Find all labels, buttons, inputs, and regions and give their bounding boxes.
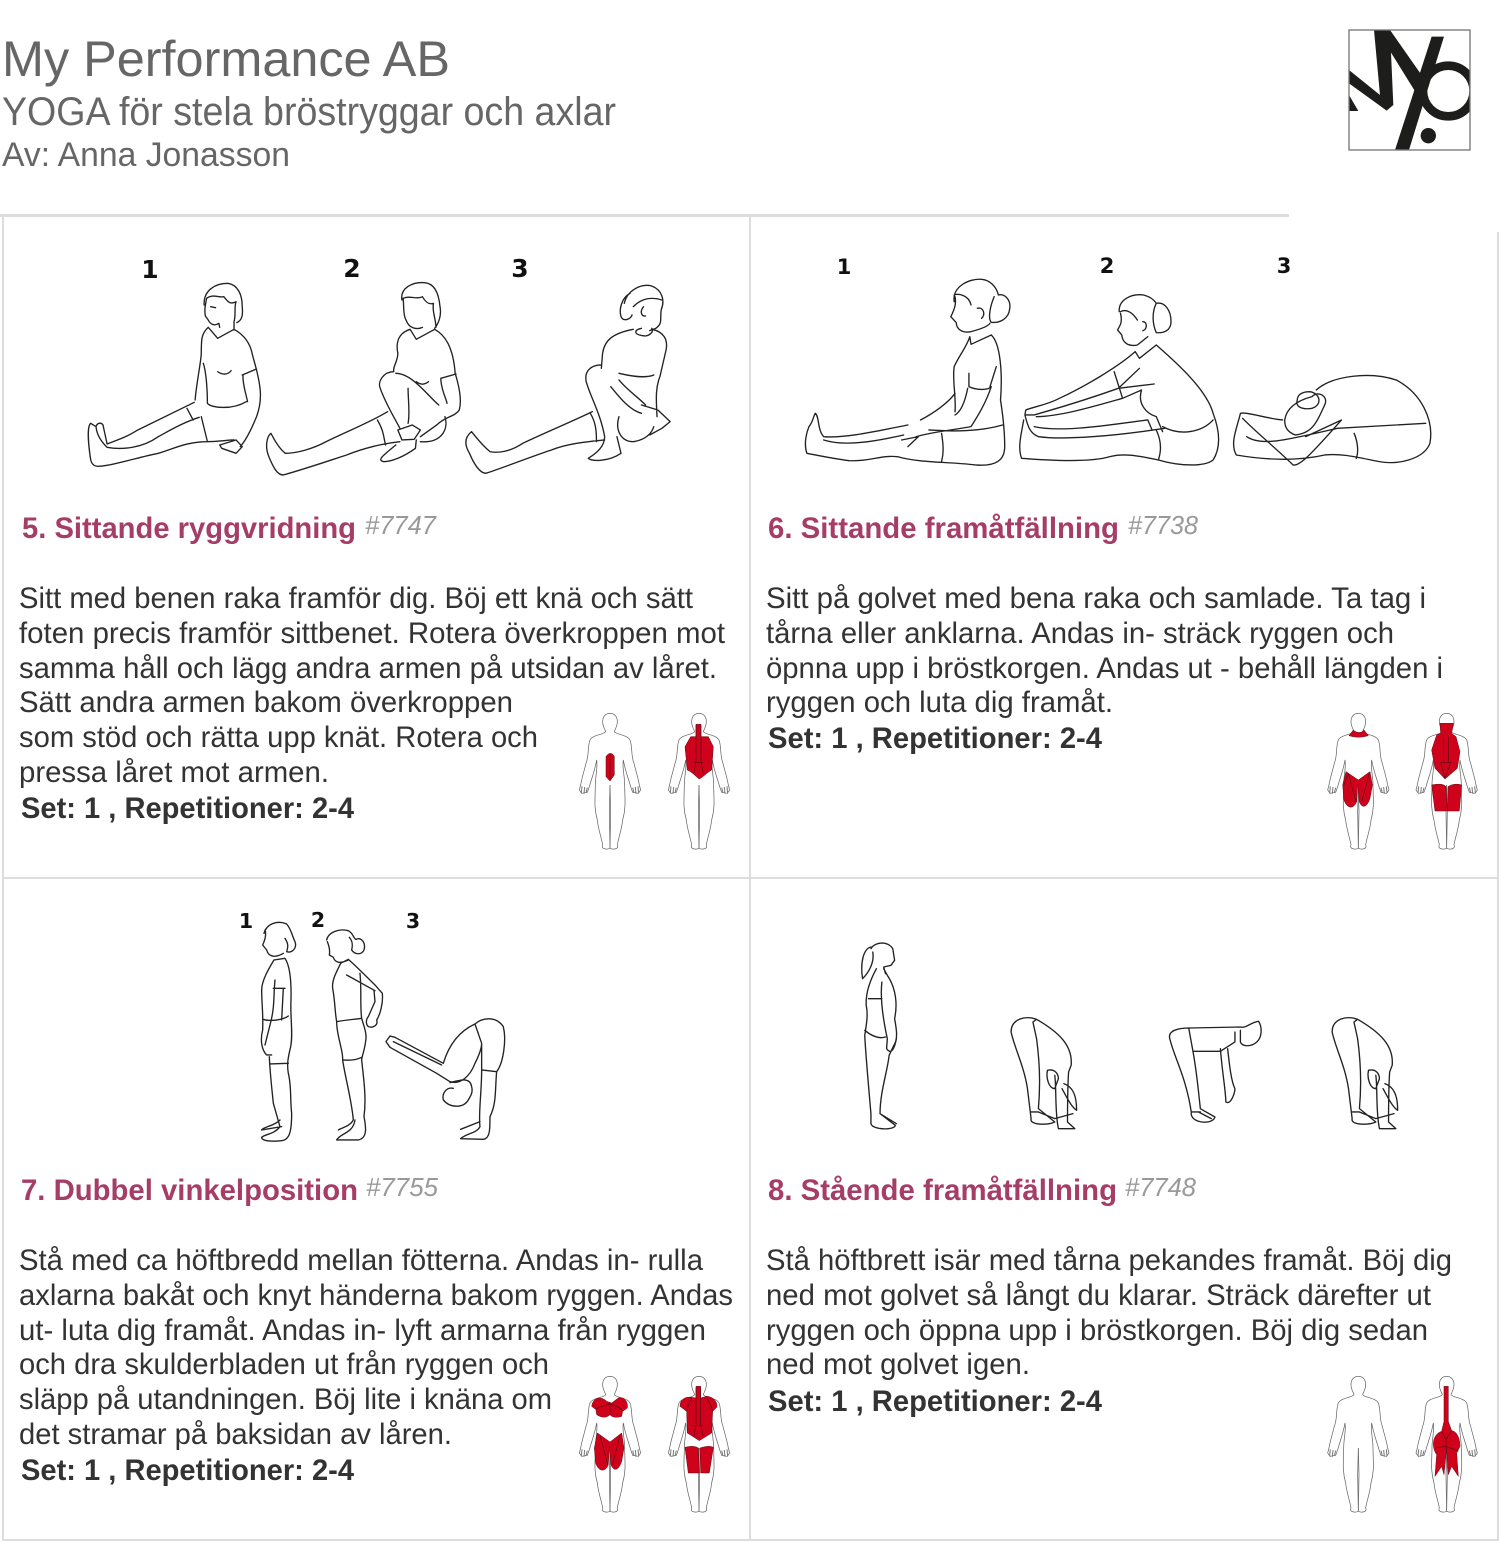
logo [1349,30,1474,150]
illustration: standing forward fold sequence [862,943,1398,1129]
instructions: Stå höftbrett isär med tårna pekandes framåt. Böj dig [766,1244,1452,1277]
muscle chart: chest, shoulders, thighs, back [579,1376,730,1512]
instructions [19,1244,733,1487]
instructions: Set: 1 , Repetitioner: 2-4 [768,1385,1103,1418]
instructions: Sätt andra armen bakom överkroppen [19,686,513,719]
instructions: samma håll och lägg andra armen på utsidan av låret. [19,652,717,685]
instructions: ryggen och luta dig framåt. [766,686,1113,719]
illustration: standing double angle pose sequence: 3 [406,909,420,933]
instructions: Set: 1 , Repetitioner: 2-4 [21,1454,355,1487]
instructions: och dra skulderbladen ut från ryggen och [19,1348,549,1381]
reference number: #7748 [1125,1174,1197,1202]
instructions [766,1244,1452,1418]
muscle chart: neck, thighs, back [1328,713,1477,849]
instructions [766,582,1443,755]
illustration: standing double angle pose sequence [239,908,505,1141]
panel: exercise 5 [19,254,730,849]
panel: exercise 6 [766,254,1477,849]
muscle chart: abdominals and back [579,713,730,849]
instructions: det stramar på baksidan av låren. [19,1418,452,1451]
instructions: släpp på utandningen. Böj lite i knäna om [19,1383,552,1416]
reference number: #7738 [1128,512,1199,540]
heading: 8. Stående framåtfällning [768,1174,1117,1207]
instructions: ut- luta dig framåt. Andas in- lyft armarna från ryggen [19,1314,706,1347]
instructions: öpnna upp i bröstkorgen. Andas ut - behåll längden i [766,652,1443,685]
instructions: Set: 1 , Repetitioner: 2-4 [21,792,355,825]
heading: 6. Sittande framåtfällning [768,512,1119,545]
illustration: seated forward fold sequence: 3 [1277,254,1291,278]
illustration: seated twist sequence [88,254,670,475]
instructions [19,582,725,825]
heading: 7. Dubbel vinkelposition [21,1174,358,1207]
instructions: som stöd och rätta upp knät. Rotera och [19,721,538,754]
reference number: #7755 [366,1174,439,1202]
illustration: seated twist sequence: 1 [141,255,159,284]
muscle chart: lower back, glutes, hamstrings [1328,1376,1477,1512]
title: My Performance AB [2,31,450,87]
illustration: seated forward fold sequence: 2 [1100,254,1114,278]
author: Av: Anna Jonasson [2,136,290,174]
instructions: foten precis framför sittbenet. Rotera överkroppen mot [19,617,725,650]
instructions: Sitt på golvet med bena raka och samlade. Ta tag i [766,582,1426,615]
panel: exercise 7 [19,908,733,1512]
subtitle: YOGA för stela bröstryggar och axlar [2,90,616,134]
instructions: tårna eller anklarna. Andas in- sträck ryggen och [766,617,1394,650]
instructions: Stå med ca höftbredd mellan fötterna. Andas in- rulla [19,1244,704,1277]
instructions: ryggen och öppna upp i bröstkorgen. Böj dig sedan [766,1314,1428,1347]
illustration: seated twist sequence: 2 [343,254,361,283]
heading: 5. Sittande ryggvridning [22,512,356,545]
illustration: seated forward fold sequence [805,254,1431,465]
instructions: ned mot golvet igen. [766,1348,1030,1381]
illustration: standing double angle pose sequence: 1 [239,909,253,933]
illustration: standing double angle pose sequence: 2 [311,908,325,932]
reference number: #7747 [365,512,437,540]
panel: exercise 8 [766,943,1477,1512]
illustration: seated twist sequence: 3 [511,254,529,283]
instructions: ned mot golvet så långt du klarar. Sträck därefter ut [766,1279,1431,1312]
instructions: Sitt med benen raka framför dig. Böj ett knä och sätt [19,582,693,615]
instructions: pressa låret mot armen. [19,756,329,789]
illustration: seated forward fold sequence: 1 [837,255,851,279]
instructions: axlarna bakåt och knyt händerna bakom ryggen. Andas [19,1279,733,1312]
instructions: Set: 1 , Repetitioner: 2-4 [768,722,1103,755]
